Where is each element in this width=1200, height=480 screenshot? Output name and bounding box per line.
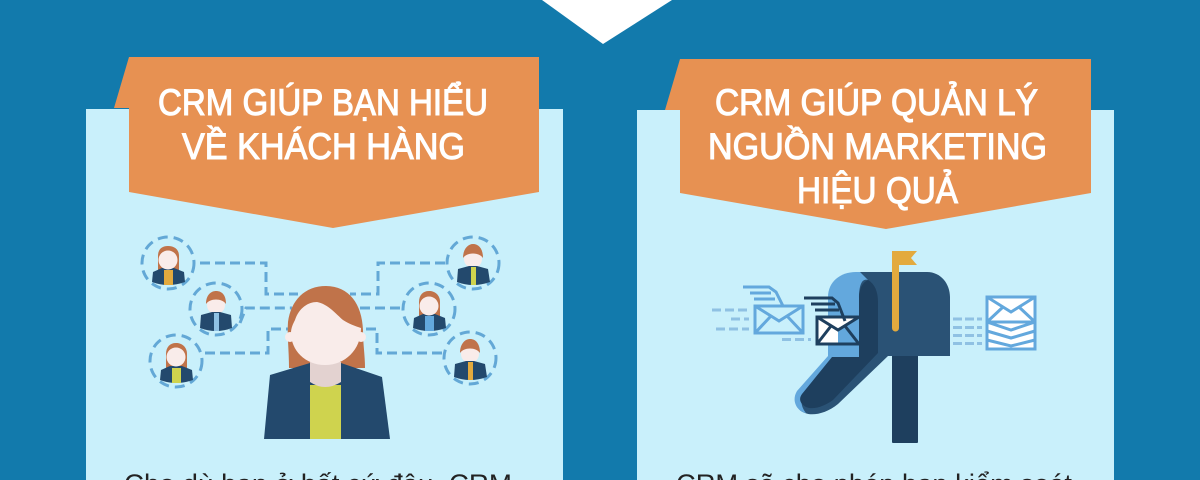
mailbox post (892, 350, 918, 443)
mailbox inner (800, 280, 878, 408)
heading line 1: CRM GIÚP BẠN HIỂU (158, 81, 488, 123)
icon: person middle left (190, 283, 242, 335)
icon: light envelope (743, 287, 803, 333)
heading line 1: CRM GIÚP QUẢN LÝ (715, 82, 1038, 123)
mailbox back light (828, 272, 875, 358)
heading banner: effective marketing (665, 59, 1091, 229)
panel: effective marketing (637, 59, 1114, 480)
motion lines left (712, 310, 811, 340)
icon: central woman (264, 286, 390, 439)
mailbox flag (892, 251, 917, 332)
mailbox illustration (712, 251, 1035, 443)
mailbox door light edge (795, 356, 836, 413)
icon: person top left (142, 237, 194, 289)
panel: understand customers (86, 57, 563, 480)
icon: person bottom left (150, 335, 202, 387)
icon: envelope stack (987, 297, 1035, 349)
mailbox body (795, 272, 950, 414)
icon: dark envelope (804, 298, 859, 344)
heading line 3: HIỆU QUẢ (797, 170, 958, 211)
icon: person bottom right (444, 332, 496, 384)
heading line 2: NGUỒN MARKETING (708, 125, 1047, 167)
icon: person middle right (403, 283, 455, 335)
heading line 2: VỀ KHÁCH HÀNG (182, 126, 465, 167)
heading banner: understand customers (114, 57, 539, 228)
connector lines (200, 263, 445, 353)
network illustration (142, 237, 499, 439)
white arrow pointer (542, 0, 672, 44)
icon: person top right (447, 237, 499, 289)
motion lines right (953, 319, 982, 344)
